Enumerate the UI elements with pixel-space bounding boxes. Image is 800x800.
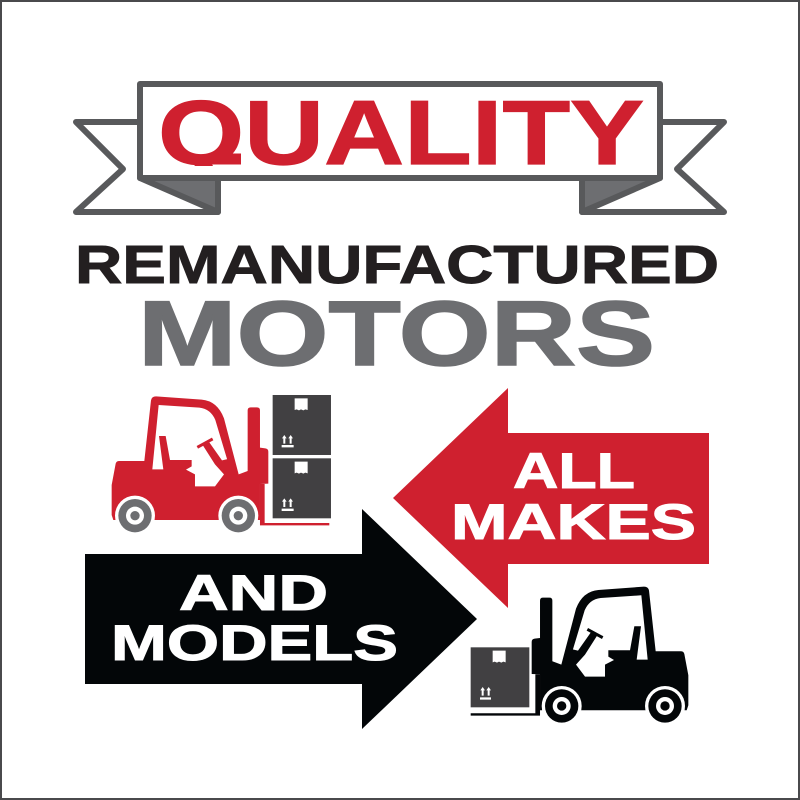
ribbon banner: [76, 84, 724, 212]
cab opening: [152, 405, 227, 486]
banner panel: [140, 84, 660, 178]
red arrow: all makes: [393, 388, 709, 608]
heading: MOTORS: MOTORS: [138, 283, 655, 385]
front wheel: [218, 496, 258, 536]
forks: [260, 484, 329, 525]
icon: black forklift with one box: [471, 587, 688, 726]
forklift body: [532, 587, 688, 710]
front wheel: [542, 686, 582, 726]
label: AND: AND: [179, 565, 328, 621]
left ribbon fold: [140, 178, 218, 212]
bottom box: [273, 458, 331, 518]
black arrow: and models: [85, 509, 477, 729]
icon: red forklift with two boxes: [112, 395, 331, 536]
right ribbon fold: [582, 178, 660, 212]
label: MODELS: MODELS: [111, 615, 398, 671]
label: ALL: ALL: [513, 443, 635, 499]
left ribbon tail: [76, 122, 218, 212]
rear wheel: [645, 686, 685, 726]
label: MAKES: MAKES: [451, 494, 696, 550]
forks: [471, 674, 540, 716]
heading: REMANUFACTURED: REMANUFACTURED: [75, 235, 719, 295]
top box: [273, 395, 331, 455]
icon: box on black forklift: [471, 647, 529, 707]
right ribbon tail: [582, 122, 724, 212]
steering wheel: [197, 439, 213, 447]
steering wheel: [587, 629, 603, 638]
forklift body: [112, 396, 268, 520]
title: QUALITY: [162, 100, 644, 166]
title: QUALITY: QUALITY: [158, 83, 644, 184]
cab opening: [573, 595, 648, 677]
rear wheel: [115, 496, 155, 536]
